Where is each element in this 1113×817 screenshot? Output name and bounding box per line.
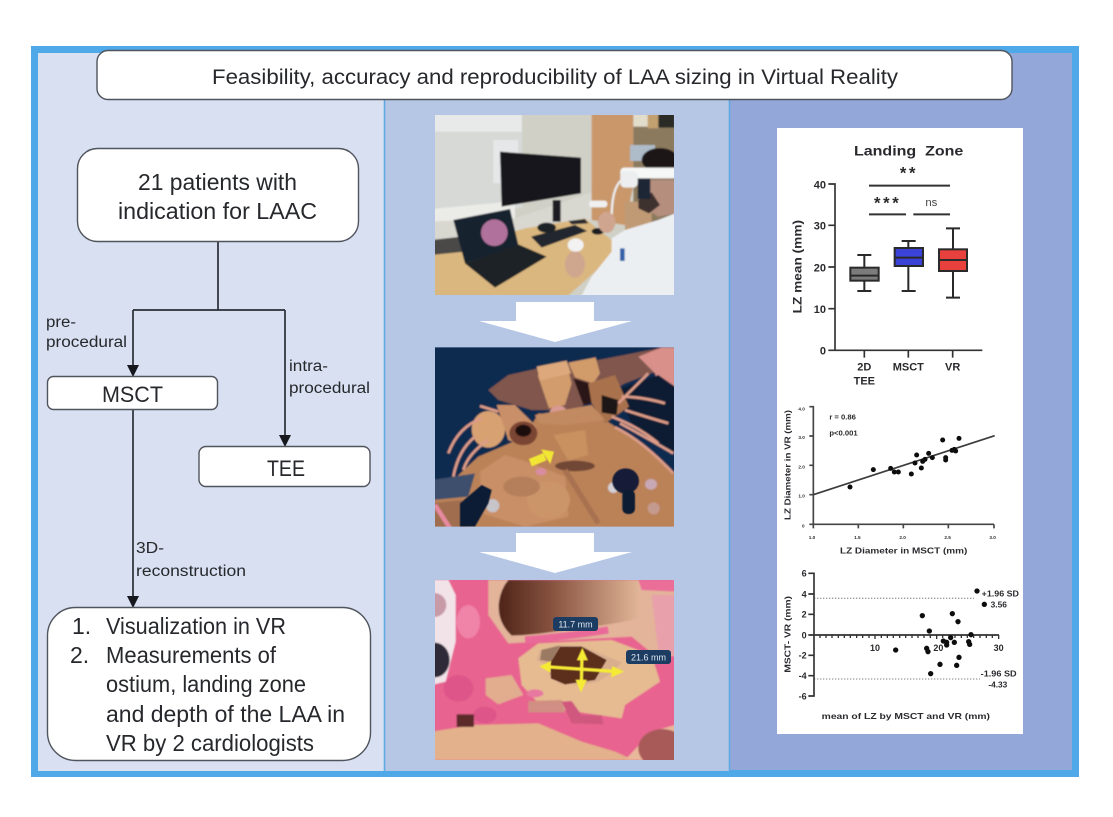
photo: cardiologist using VR headset — [432, 112, 678, 298]
box: MSCT — [895, 241, 923, 291]
y axis labels: 10 — [814, 304, 826, 316]
limit labels: +1.96 SD — [982, 589, 1019, 599]
x axis labels: MSCT — [893, 362, 924, 374]
limit labels — [981, 589, 1019, 689]
y tick labels: -4 — [799, 671, 807, 681]
label: intra-procedural: procedural — [289, 380, 370, 397]
axis titles: MSCT- VR (mm) — [783, 596, 793, 673]
arrow: photo to VR model — [479, 302, 632, 342]
box: visualization and measurements: ostium, landing zone — [106, 671, 306, 697]
statistics — [829, 413, 858, 437]
tick labels — [798, 407, 996, 540]
label: pre-procedural: procedural — [46, 334, 127, 351]
y tick labels: -6 — [799, 691, 807, 701]
connector: patients to branches — [133, 242, 285, 310]
box: VR — [939, 228, 967, 298]
x tick labels: 10 — [870, 643, 880, 653]
regression line — [813, 436, 995, 495]
box: TEE: TEE — [267, 456, 305, 481]
chart: Bland-Altman plot — [783, 569, 1019, 721]
box: 2D TEE — [850, 255, 879, 291]
x axis labels — [854, 362, 960, 387]
tick labels: 2.0 — [899, 535, 906, 540]
box: 21 patients: indication for LAAC — [118, 198, 317, 224]
limit labels: 3.56 — [991, 599, 1007, 609]
y axis labels: 20 — [814, 262, 826, 274]
box: visualization and measurements: and depth of the LAA in — [106, 701, 345, 727]
y axis labels: 30 — [814, 221, 826, 233]
panel: study flowchart — [46, 148, 370, 760]
arrow: VR model to measurement — [479, 533, 632, 573]
x tick labels — [870, 643, 1004, 653]
arrow: to TEE — [279, 310, 291, 447]
tick labels: 3.0 — [989, 535, 996, 540]
box: MSCT — [48, 376, 218, 410]
y tick labels: 4 — [802, 589, 807, 599]
tick labels: 1.5 — [854, 535, 861, 540]
box: MSCT: MSCT — [102, 382, 163, 407]
statistics: p<0.001 — [829, 428, 858, 437]
chart: Bland-Altman plot: mean of LZ by MSCT and VR (mm) — [822, 711, 990, 721]
significance brackets — [869, 163, 950, 214]
box: 21 patients: 21 patients with — [138, 169, 297, 195]
box: visualization and measurements: 1. — [72, 613, 91, 639]
image: 3D heart model in VR — [432, 345, 678, 530]
y tick labels: 0 — [802, 630, 807, 640]
y axis labels: 0 — [820, 346, 826, 358]
title — [97, 50, 1012, 100]
box: visualization and measurements: Visualization in VR — [106, 613, 286, 639]
box: TEE — [199, 446, 370, 486]
chart: landing zone box plot — [791, 143, 982, 387]
chart title: Landing Zone — [854, 143, 964, 159]
tick labels: 1.0 — [809, 535, 816, 540]
label: 3D-reconstruction — [136, 540, 246, 580]
panel: VR images background — [385, 53, 729, 771]
chart: correlation scatter plot: LZ Diameter in MSCT (mm) — [840, 545, 968, 555]
label: 21.6 mm: 21.6 mm — [631, 652, 666, 662]
box: visualization and measurements: Measurements of — [106, 642, 277, 668]
y tick labels: -2 — [799, 651, 807, 661]
axes — [828, 184, 982, 358]
tick labels: 3.0 — [798, 435, 805, 440]
panel: results charts — [777, 128, 1023, 734]
y axis title: LZ mean (mm) — [791, 220, 805, 313]
x tick labels: 30 — [994, 643, 1004, 653]
y tick labels — [799, 569, 807, 701]
significance brackets: ns — [925, 197, 938, 209]
axes — [809, 407, 994, 528]
chart: correlation scatter plot — [783, 407, 996, 555]
tick labels: 2.0 — [798, 464, 805, 469]
tick labels: 1.0 — [798, 494, 805, 499]
limits of agreement — [814, 598, 980, 679]
label: intra-procedural: intra- — [289, 358, 328, 375]
tick labels: 4.0 — [798, 407, 805, 412]
axes — [808, 573, 999, 696]
limit labels: -4.33 — [988, 679, 1008, 689]
limit labels: -1.96 SD — [981, 669, 1017, 679]
arrow: to MSCT — [127, 310, 139, 377]
axis titles: LZ Diameter in VR (mm) — [783, 410, 793, 520]
data points — [847, 436, 961, 489]
x axis labels: 2D — [857, 362, 871, 374]
y axis labels — [814, 179, 826, 358]
label: pre-procedural — [46, 314, 127, 351]
image: LAA ostium measurement in VR — [435, 580, 674, 760]
panel: study flow background — [38, 53, 384, 771]
label: pre-procedural: pre- — [46, 314, 76, 331]
x axis labels: TEE — [854, 375, 875, 387]
significance brackets: *** — [874, 193, 901, 212]
tick labels: 2.5 — [944, 535, 951, 540]
panel dividers — [384, 53, 730, 771]
tick labels: 0 — [802, 523, 805, 528]
x tick labels: 20 — [933, 643, 943, 653]
y tick labels: 6 — [802, 569, 807, 579]
significance brackets: ** — [900, 163, 918, 182]
data points — [893, 588, 987, 676]
label: 11.7 mm — [553, 617, 598, 631]
statistics: r = 0.86 — [829, 413, 856, 422]
box: visualization and measurements: 2. — [70, 642, 89, 668]
y axis labels: 40 — [814, 179, 826, 191]
measurement arrows — [539, 648, 624, 692]
label: 21.6 mm — [626, 650, 671, 664]
label: intra-procedural — [289, 358, 370, 397]
box: 21 patients — [78, 148, 358, 242]
label: 11.7 mm: 11.7 mm — [558, 620, 593, 630]
label: 3D-reconstruction: reconstruction — [136, 563, 246, 580]
label: 3D-reconstruction: 3D- — [136, 540, 164, 557]
title: Feasibility, accuracy and reproducibility of LAA sizing in Virtual Reality — [212, 66, 899, 89]
box: visualization and measurements: VR by 2 cardiologists — [106, 730, 314, 756]
box: visualization and measurements — [48, 608, 370, 760]
y tick labels: 2 — [802, 610, 807, 620]
x axis labels: VR — [945, 362, 960, 374]
arrow: to VR measurements — [127, 410, 139, 608]
